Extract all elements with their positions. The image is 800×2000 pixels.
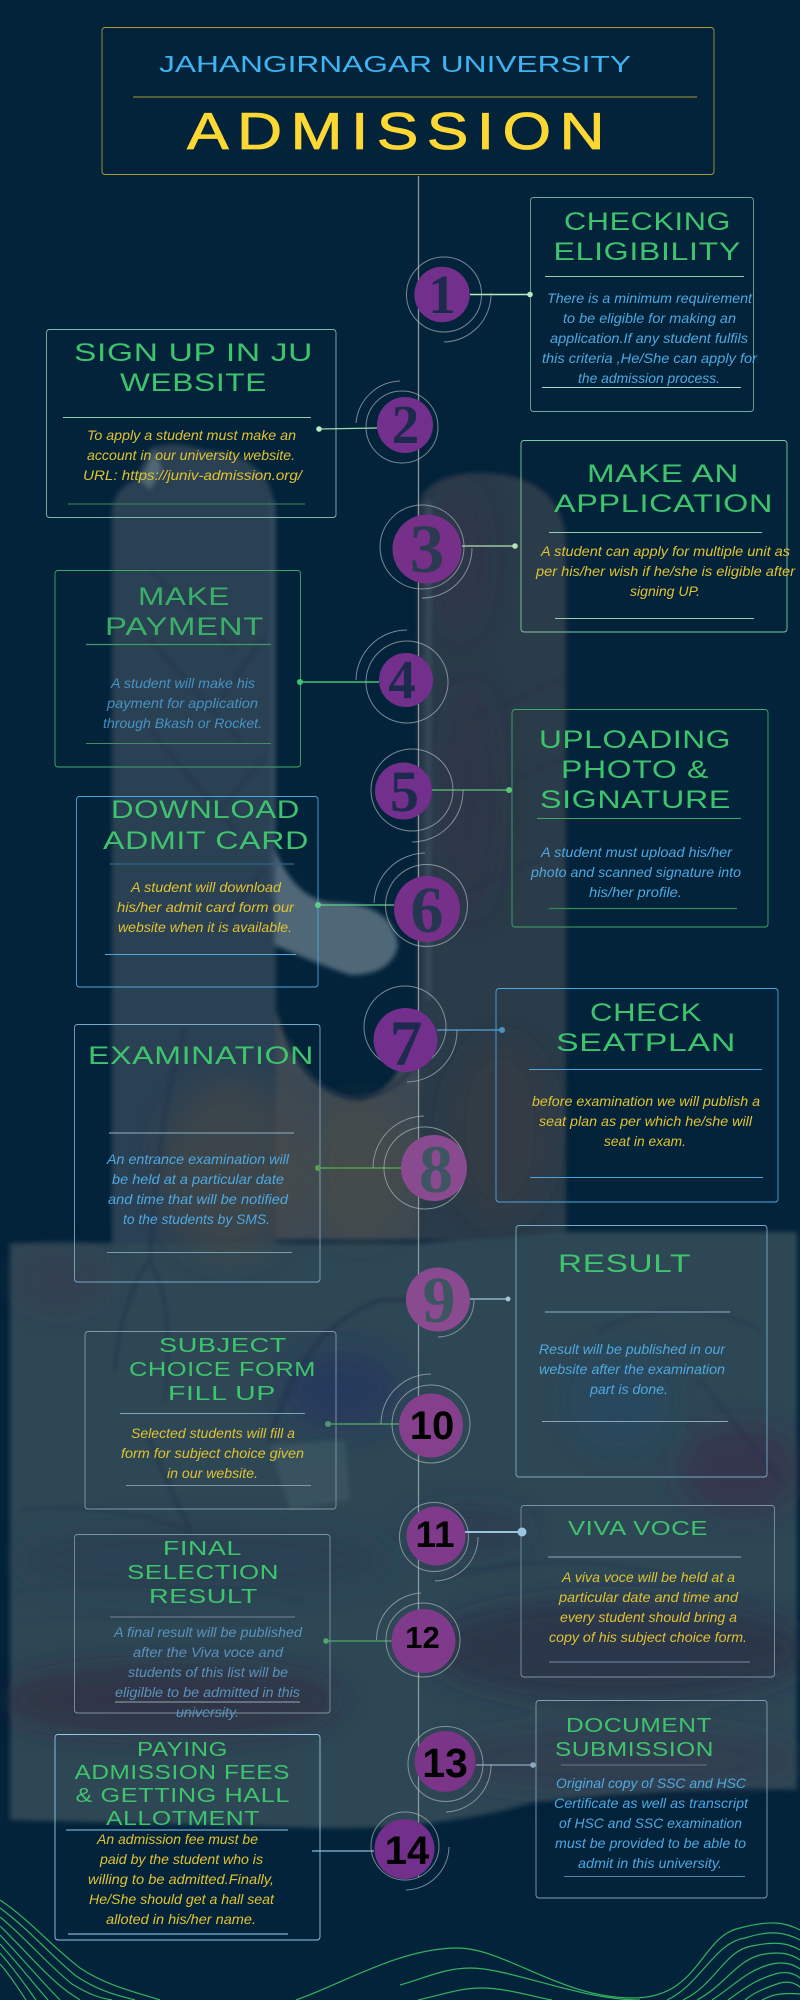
node 4: 4 xyxy=(388,649,416,710)
step 12: final selection result: SELECTION xyxy=(127,1561,279,1584)
step 1: checking eligibility: to be eligible for making an xyxy=(563,310,736,326)
step 9: result: RESULT xyxy=(558,1250,691,1278)
step 13: document submission: Original copy of SSC and HSC xyxy=(556,1775,747,1791)
node 9 xyxy=(406,1264,510,1337)
step 12: final selection result xyxy=(74,1534,330,1720)
step 2: sign up: URL: https://juniv-admission.org/ xyxy=(83,467,304,483)
step 6: download admit card: DOWNLOAD xyxy=(111,796,300,824)
step 14: paying admission fees xyxy=(55,1734,320,1940)
step 5: uploading photo and signature: UPLOADING xyxy=(539,726,731,754)
step 14: paying admission fees: ALLOTMENT xyxy=(106,1807,260,1830)
node 1: 1 xyxy=(428,264,456,325)
step 1: checking eligibility: the admission process. xyxy=(578,370,720,386)
step 11: viva voce: copy of his subject choice form. xyxy=(549,1629,747,1645)
step 8: examination: and time that will be notified xyxy=(108,1191,289,1207)
step 12: final selection result: after the Viva voce and xyxy=(133,1644,284,1660)
background photo xyxy=(0,444,800,1828)
step 12: final selection result: university. xyxy=(176,1704,239,1720)
step 9: result: Result will be published in our xyxy=(539,1341,726,1357)
step 1: checking eligibility: application.If any student fulfils xyxy=(550,330,748,346)
node 14: 14 xyxy=(385,1829,430,1873)
step 12: final selection result: A final result will be published xyxy=(113,1624,303,1640)
step 9: result: website after the examination xyxy=(539,1361,725,1377)
node 7 xyxy=(364,986,505,1082)
step 12: final selection result: RESULT xyxy=(149,1585,258,1608)
node 11: 11 xyxy=(415,1514,455,1555)
node 10 xyxy=(325,1374,470,1463)
step 6: download admit card: ADMIT CARD xyxy=(103,827,309,855)
step 14: paying admission fees: & GETTING HALL xyxy=(76,1784,290,1807)
node 10: 10 xyxy=(410,1404,454,1448)
step 2: sign up: WEBSITE xyxy=(120,369,267,397)
step 2: sign up: SIGN UP IN JU xyxy=(74,339,313,367)
step 11: viva voce: particular date and time and xyxy=(558,1589,739,1605)
bottom wave lines xyxy=(0,1900,800,2000)
step 7: check seatplan: seat in exam. xyxy=(604,1133,686,1149)
step 2: sign up xyxy=(46,330,336,518)
step 1: checking eligibility: this criteria ,He/She can apply for xyxy=(542,350,758,366)
step 7: check seatplan: CHECK xyxy=(590,999,702,1027)
node 9: 9 xyxy=(422,1264,456,1337)
step 14: paying admission fees: He/She should get a hall seat xyxy=(89,1891,275,1907)
node 1 xyxy=(406,257,533,342)
step 8: examination xyxy=(74,1024,320,1282)
step 7: check seatplan: before examination we will publish a xyxy=(532,1093,760,1109)
step 3: make an application: signing UP. xyxy=(630,583,700,599)
step 10: subject choice form: SUBJECT xyxy=(159,1334,287,1357)
node 2 xyxy=(316,381,438,463)
step 6: download admit card: A student will download xyxy=(130,879,282,895)
step 12: final selection result: FINAL xyxy=(163,1537,242,1560)
step 4: make payment: MAKE xyxy=(138,583,230,611)
step 1: checking eligibility xyxy=(530,198,758,412)
step 7: check seatplan: seat plan as per which he/she will xyxy=(539,1113,753,1129)
node 6: 6 xyxy=(410,874,444,947)
step 5: uploading photo and signature: his/her profile. xyxy=(589,884,682,900)
node 14 xyxy=(312,1812,449,1890)
step 13: document submission xyxy=(536,1700,767,1898)
step 4: make payment: payment for application xyxy=(106,695,258,711)
step 10: subject choice form: FILL UP xyxy=(168,1382,276,1405)
step 6: download admit card xyxy=(76,796,318,987)
step 11: viva voce: every student should bring a xyxy=(560,1609,737,1625)
step 4: make payment: through Bkash or Rocket. xyxy=(103,715,262,731)
admission heading: ADMISSION xyxy=(187,103,613,161)
node 5 xyxy=(371,749,512,842)
step 3: make an application: APPLICATION xyxy=(554,490,773,518)
step 14: paying admission fees: PAYING xyxy=(137,1738,228,1761)
step 14: paying admission fees: ADMISSION FEES xyxy=(74,1761,290,1784)
step 7: check seatplan: SEATPLAN xyxy=(556,1029,736,1057)
node 8 xyxy=(315,1116,467,1209)
node 13: 13 xyxy=(422,1740,468,1786)
step 8: examination: An entrance examination will xyxy=(106,1151,290,1167)
step 3: make an application: MAKE AN xyxy=(587,460,739,488)
step 8: examination: be held at a particular date xyxy=(112,1171,284,1187)
step 13: document submission: admit in this university. xyxy=(578,1855,722,1871)
step 10: subject choice form: CHOICE FORM xyxy=(129,1358,316,1381)
step 6: download admit card: website when it is available. xyxy=(118,919,292,935)
step 3: make an application xyxy=(521,440,796,632)
node 6 xyxy=(315,853,468,947)
node 2: 2 xyxy=(392,394,419,455)
step 3: make an application: A student can apply for multiple unit as xyxy=(540,543,790,559)
step 8: examination: EXAMINATION xyxy=(88,1042,314,1070)
step 5: uploading photo and signature xyxy=(512,710,768,927)
step 11: viva voce: A viva voce will be held at a xyxy=(561,1569,735,1585)
step 13: document submission: DOCUMENT xyxy=(566,1714,712,1737)
timeline spine xyxy=(418,176,420,1877)
step 2: sign up: To apply a student must make an xyxy=(87,427,296,443)
node 12: 12 xyxy=(405,1620,440,1655)
node 4 xyxy=(297,630,448,723)
step 10: subject choice form: form for subject choice given xyxy=(121,1445,304,1461)
node 7: 7 xyxy=(390,1008,422,1080)
university name: JAHANGIRNAGAR UNIVERSITY xyxy=(159,51,631,77)
step 4: make payment xyxy=(55,570,300,767)
step 6: download admit card: his/her admit card form our xyxy=(117,899,295,915)
step 14: paying admission fees: An admission fee must be xyxy=(96,1831,258,1847)
step 11: viva voce xyxy=(521,1506,774,1677)
step 4: make payment: PAYMENT xyxy=(105,613,264,641)
step 3: make an application: per his/her wish if he/she is eligible after xyxy=(535,563,796,579)
step 5: uploading photo and signature: PHOTO & xyxy=(561,756,709,784)
step 1: checking eligibility: ELIGIBILITY xyxy=(554,238,741,266)
node 5: 5 xyxy=(390,759,419,824)
step 13: document submission: must be provided to be able to xyxy=(555,1835,746,1851)
node 8: 8 xyxy=(419,1131,453,1207)
step 5: uploading photo and signature: SIGNATURE xyxy=(540,786,731,814)
step 8: examination: to the students by SMS. xyxy=(123,1211,270,1227)
step 10: subject choice form: in our website. xyxy=(167,1465,258,1481)
header panel xyxy=(102,28,714,174)
step 1: checking eligibility: There is a minimum requirement xyxy=(547,290,753,306)
step 10: subject choice form xyxy=(85,1332,336,1509)
step 5: uploading photo and signature: A student must upload his/her xyxy=(540,844,733,860)
step 9: result: part is done. xyxy=(589,1381,668,1397)
step 12: final selection result: eligilble to be admitted in this xyxy=(115,1684,300,1700)
node 13 xyxy=(408,1726,536,1812)
step 14: paying admission fees: paid by the student who is xyxy=(99,1851,263,1867)
step 14: paying admission fees: willing to be admitted.Finally, xyxy=(88,1871,274,1887)
step 14: paying admission fees: alloted in his/her name. xyxy=(106,1911,256,1927)
step 5: uploading photo and signature: photo and scanned signature into xyxy=(530,864,741,880)
step 11: viva voce: VIVA VOCE xyxy=(568,1517,708,1540)
step 12: final selection result: students of this list will be xyxy=(128,1664,288,1680)
node 3: 3 xyxy=(410,511,444,587)
step 9: result xyxy=(516,1226,767,1477)
step 13: document submission: SUBMISSION xyxy=(555,1738,714,1761)
step 4: make payment: A student will make his xyxy=(110,675,255,691)
step 13: document submission: of HSC and SSC examination xyxy=(559,1815,742,1831)
step 2: sign up: account in our university website. xyxy=(87,447,295,463)
step 7: check seatplan xyxy=(496,988,778,1202)
node 11 xyxy=(400,1502,526,1581)
step 13: document submission: Certificate as well as transcript xyxy=(554,1795,749,1811)
step 10: subject choice form: Selected students will fill a xyxy=(131,1425,295,1441)
node 12 xyxy=(323,1593,460,1677)
node 3 xyxy=(380,505,518,598)
step 1: checking eligibility: CHECKING xyxy=(564,208,731,236)
